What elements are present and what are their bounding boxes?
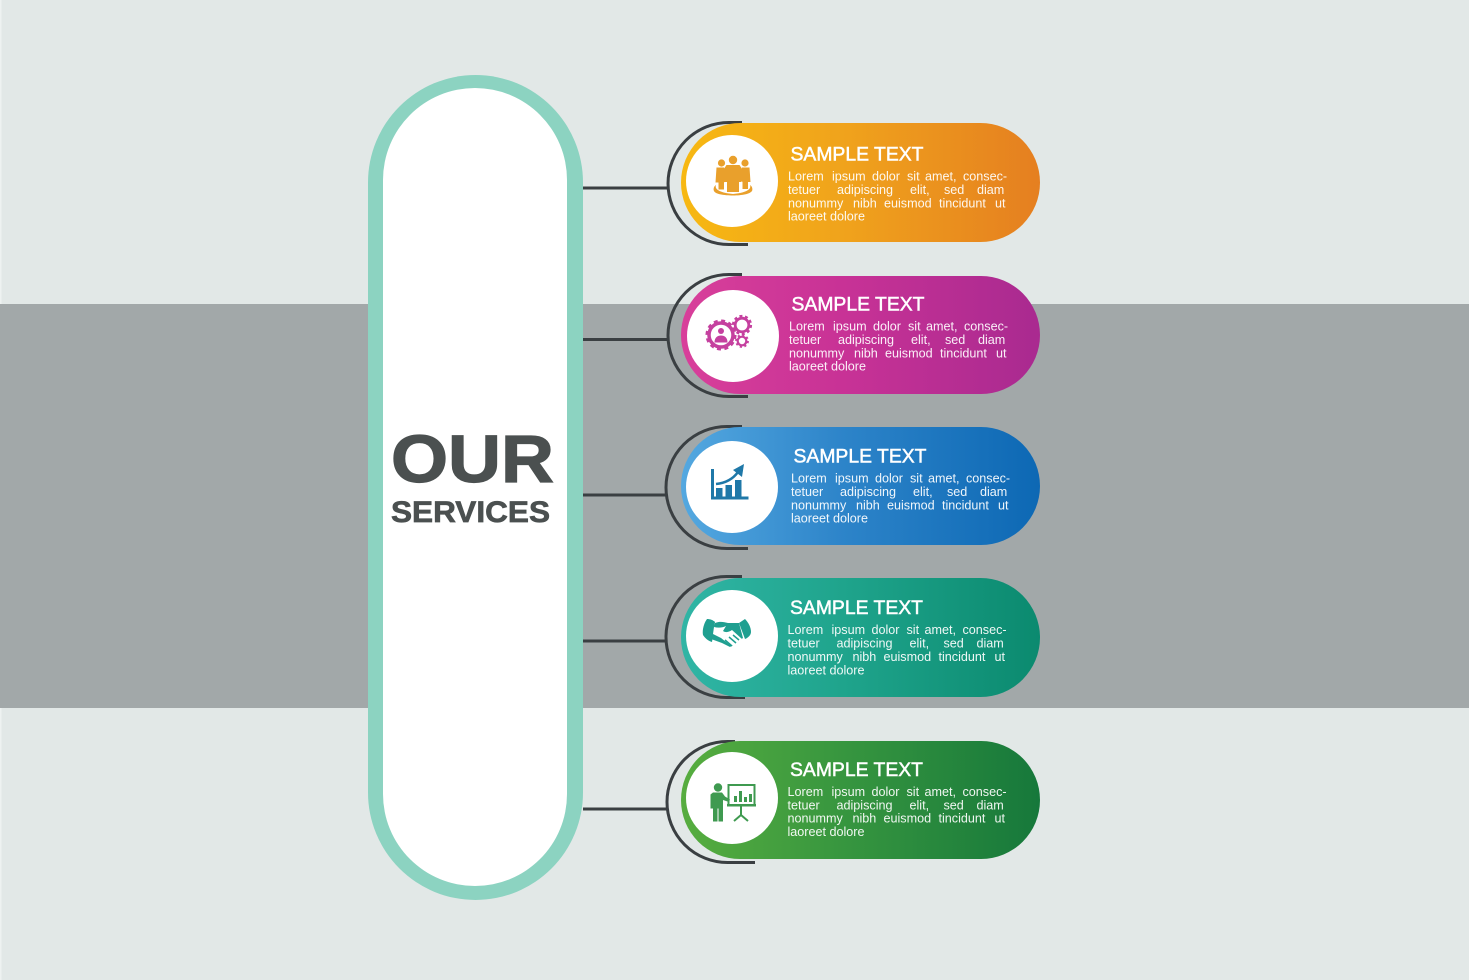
text: card 2: diam (978, 333, 1005, 347)
text: card 1: SAMPLE TEXT (790, 144, 924, 166)
icon: handshake (703, 619, 751, 647)
text: card 5: nibh (852, 812, 876, 826)
text: card 3: tincidunt (942, 498, 989, 512)
text: card 5: dolor (872, 785, 900, 799)
text: card 2: dolore (831, 360, 866, 374)
text: card 3: euismod (887, 498, 935, 512)
text: card 5: SAMPLE TEXT (790, 759, 923, 781)
text: card 4: sit (906, 623, 920, 637)
icon: growth chart (711, 464, 748, 500)
text: card 4: adipiscing (836, 637, 893, 651)
text: card 5 (788, 759, 1007, 839)
main panel: our services pill (368, 75, 583, 900)
connector 5 (583, 742, 755, 862)
text: card 1: sit (907, 170, 920, 184)
text: card 4: SAMPLE TEXT (790, 597, 923, 619)
text: card 3: adipiscing (840, 485, 896, 499)
text: card 5: ipsum (832, 785, 865, 799)
text: card 3: tetuer (791, 485, 823, 499)
text: card 4: Lorem (788, 623, 823, 637)
text: card 1: amet, (925, 170, 956, 184)
text: card 1: dolor (872, 170, 900, 184)
text: card 4: tincidunt (938, 650, 986, 664)
text: card 1: consec- (963, 170, 1007, 184)
panel: card 4 (681, 578, 1040, 697)
text: card 5: sed (944, 798, 964, 812)
text: card 3: consec- (966, 472, 1010, 486)
text: card 5: amet, (924, 785, 956, 799)
text: card 5: Lorem (788, 785, 823, 799)
text: card 1 (788, 144, 1007, 224)
text: card 3: sed (947, 485, 967, 499)
heading: our: OUR (391, 422, 554, 497)
text: card 2: nonummy (789, 346, 845, 360)
text: card 3: sit (910, 472, 923, 486)
text: card 1: tetuer (788, 183, 820, 197)
text: card 2: ut (996, 346, 1007, 360)
text: card 4: ut (994, 650, 1006, 664)
text: card 5: nonummy (788, 812, 843, 826)
text: card 3: diam (980, 485, 1007, 499)
icon: gears with person (707, 316, 751, 349)
text: card 5: consec- (962, 785, 1007, 799)
text: card 1: dolore (830, 210, 865, 224)
connector 1 (583, 122, 748, 244)
text: card 2 (789, 294, 1008, 374)
text: card 5: tetuer (788, 798, 820, 812)
icon: team of people (714, 156, 752, 196)
text: card 4: ipsum (832, 623, 865, 637)
text: card 3: Lorem (791, 472, 827, 486)
text: card 5: dolore (830, 825, 865, 839)
text: card 5: elit, (910, 798, 929, 812)
panel: card 3 (681, 427, 1040, 545)
text: card 2: consec- (964, 320, 1008, 334)
connector 2 (583, 274, 748, 396)
text: card 4: nonummy (788, 650, 843, 664)
text: card 2: Lorem (789, 320, 825, 334)
text: card 2: euismod (885, 346, 933, 360)
text: card 5: euismod (884, 812, 931, 826)
text: card 4: euismod (884, 650, 931, 664)
text: card 2: laoreet (789, 360, 828, 374)
text: card 3: nonummy (791, 498, 847, 512)
text: card 1: adipiscing (837, 183, 893, 197)
text: card 1: sed (944, 183, 964, 197)
text: card 4: diam (976, 637, 1004, 651)
text: card 3 (791, 446, 1010, 526)
text: card 1: tincidunt (939, 196, 986, 210)
text: card 3: elit, (913, 485, 933, 499)
text: card 2: sed (945, 333, 965, 347)
text: card 4: dolore (830, 663, 865, 677)
text: card 3: ipsum (835, 472, 869, 486)
text: card 3: dolor (875, 472, 903, 486)
text: card 1: ut (995, 196, 1006, 210)
text: card 2: ipsum (833, 320, 867, 334)
text: card 4: amet, (924, 623, 956, 637)
text: card 5: ut (994, 812, 1006, 826)
text: card 5: tincidunt (938, 812, 986, 826)
text: card 3: laoreet (791, 512, 830, 526)
text: card 2: SAMPLE TEXT (792, 294, 925, 316)
text: card 1: euismod (884, 196, 932, 210)
text: card 4: elit, (910, 637, 929, 651)
text: card 1: nibh (853, 196, 877, 210)
text: card 4: nibh (852, 650, 876, 664)
text: card 4: consec- (962, 623, 1007, 637)
text: card 2: dolor (873, 320, 901, 334)
text: card 1: diam (977, 183, 1004, 197)
text: card 1: laoreet (788, 210, 827, 224)
text: card 1: nonummy (788, 196, 844, 210)
text: card 1: ipsum (832, 170, 866, 184)
panel: card 2 (681, 276, 1040, 394)
text: card 2: sit (908, 320, 921, 334)
connector 3 (583, 426, 748, 548)
text: card 2: nibh (854, 346, 878, 360)
text: card 5: adipiscing (836, 798, 893, 812)
panel: card 5 (681, 741, 1040, 859)
text: card 2: elit, (911, 333, 931, 347)
heading: services: SERVICES (391, 496, 550, 529)
text: card 4 (788, 597, 1007, 677)
text: card 3: ut (998, 498, 1009, 512)
text: card 5: diam (976, 798, 1004, 812)
text: card 3: nibh (856, 498, 880, 512)
text: card 4: sed (944, 637, 964, 651)
text: card 3: dolore (833, 512, 868, 526)
text: card 4: tetuer (788, 637, 820, 651)
text: card 1: Lorem (788, 170, 824, 184)
text: card 2: amet, (926, 320, 958, 334)
text: card 2: tincidunt (940, 346, 987, 360)
text: card 5: laoreet (788, 825, 827, 839)
text: card 5: sit (906, 785, 920, 799)
text: card 2: tetuer (789, 333, 821, 347)
text: card 4: dolor (872, 623, 900, 637)
text: card 1: elit, (910, 183, 930, 197)
connector 4 (583, 576, 745, 698)
icon: presenter with board (710, 783, 756, 822)
panel: card 1 (681, 123, 1040, 242)
text: card 3: amet, (928, 472, 960, 486)
text: card 4: laoreet (788, 663, 827, 677)
text: card 3: SAMPLE TEXT (794, 446, 927, 468)
text: card 2: adipiscing (838, 333, 894, 347)
